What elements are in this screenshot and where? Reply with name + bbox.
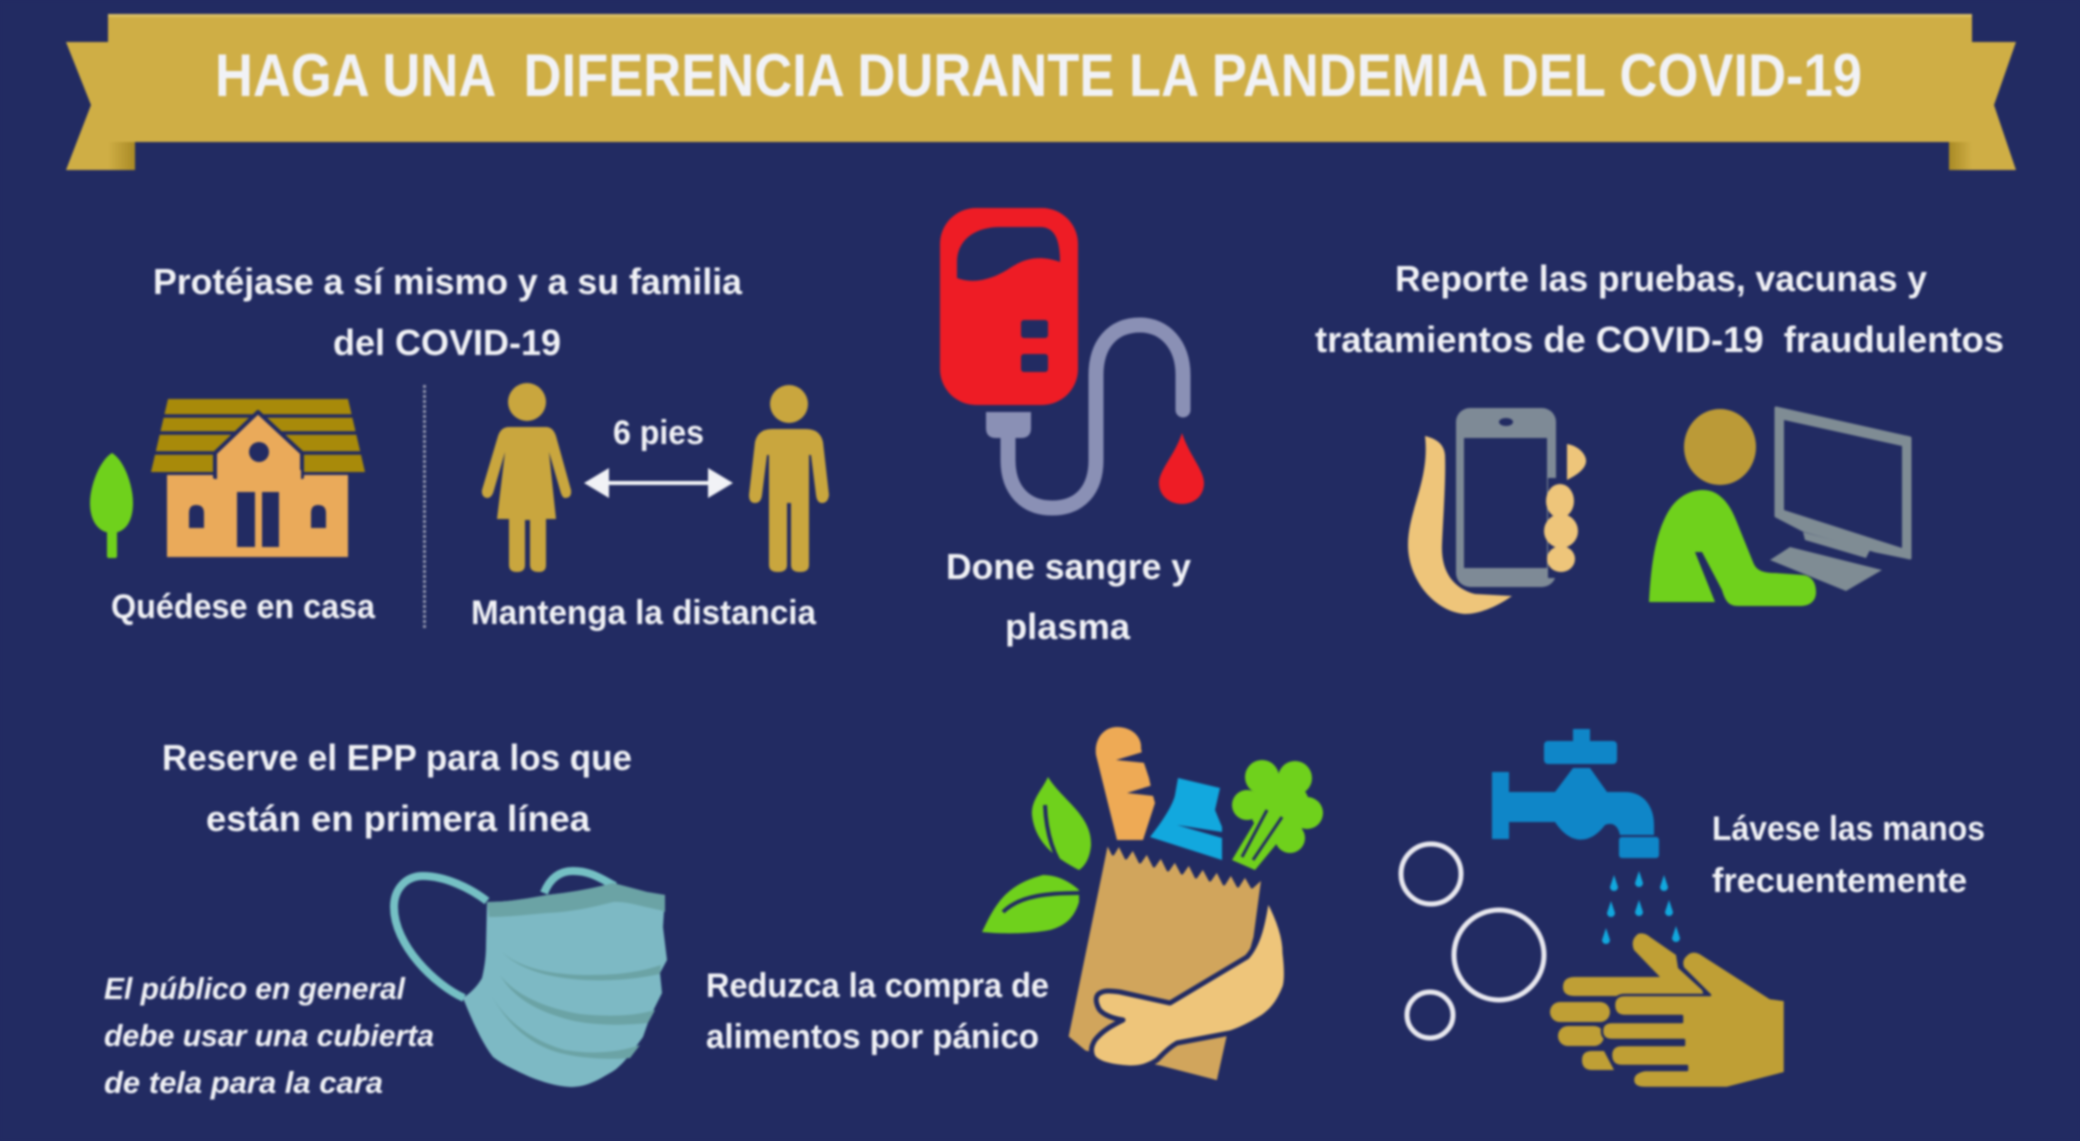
- label: keep distance: Mantenga la distancia: [471, 594, 817, 632]
- note: cloth face covering: [104, 971, 434, 1100]
- icon: washing hands: [1550, 933, 1785, 1088]
- heading: reserve PPE: [162, 737, 632, 839]
- icon: face mask: [394, 871, 667, 1087]
- heading: reserve PPE: están en primera línea: [206, 798, 591, 839]
- heading: reserve PPE: Reserve el EPP para los que: [162, 737, 632, 778]
- icon: house: [151, 399, 365, 557]
- label: stay home: Quédese en casa: [111, 588, 376, 626]
- icon: water faucet: [1492, 729, 1659, 858]
- label: panic buying: Reduzca la compra de: [706, 967, 1049, 1005]
- icon: blood bag: [940, 208, 1204, 508]
- note: cloth face covering: de tela para la cara: [104, 1065, 383, 1100]
- label: donate blood: Done sangre y: [946, 546, 1191, 587]
- icon: hand holding phone: [1408, 408, 1586, 614]
- heading: protect yourself: Protéjase a sí mismo y a su familia: [153, 261, 743, 302]
- label: wash your hands: [1712, 810, 1985, 900]
- icon: man: [749, 385, 829, 572]
- heading: protect yourself: del COVID-19: [333, 322, 561, 363]
- label: wash your hands: frecuentemente: [1712, 862, 1967, 900]
- note: cloth face covering: debe usar una cubierta: [104, 1018, 434, 1053]
- label: six feet: 6 pies: [613, 414, 704, 452]
- icon: water drops: [1602, 871, 1680, 944]
- note: cloth face covering: El público en general: [104, 971, 406, 1006]
- heading: report fraud: [1315, 258, 2004, 360]
- icon: person at computer: [1649, 408, 1910, 606]
- label: panic buying: alimentos por pánico: [706, 1018, 1039, 1056]
- icon: tree: [90, 453, 133, 558]
- label: donate blood: plasma: [1005, 606, 1131, 647]
- label: wash your hands: Lávese las manos: [1712, 810, 1985, 848]
- heading: report fraud: tratamientos de COVID-19 fraudulentos: [1315, 319, 2004, 360]
- arrow: distance: [584, 468, 733, 498]
- heading: protect yourself: [153, 261, 743, 363]
- icon: woman: [482, 383, 571, 572]
- label: panic buying: [706, 967, 1049, 1056]
- title banner: HAGA UNA DIFERENCIA DURANTE LA PANDEMIA DEL COVID-19: [215, 42, 1862, 109]
- heading: report fraud: Reporte las pruebas, vacunas y: [1395, 258, 1927, 299]
- title banner: [66, 14, 2016, 170]
- icon: soap bubbles: [1401, 844, 1544, 1038]
- label: donate blood: [946, 546, 1191, 647]
- icon: grocery bag: [982, 727, 1323, 1082]
